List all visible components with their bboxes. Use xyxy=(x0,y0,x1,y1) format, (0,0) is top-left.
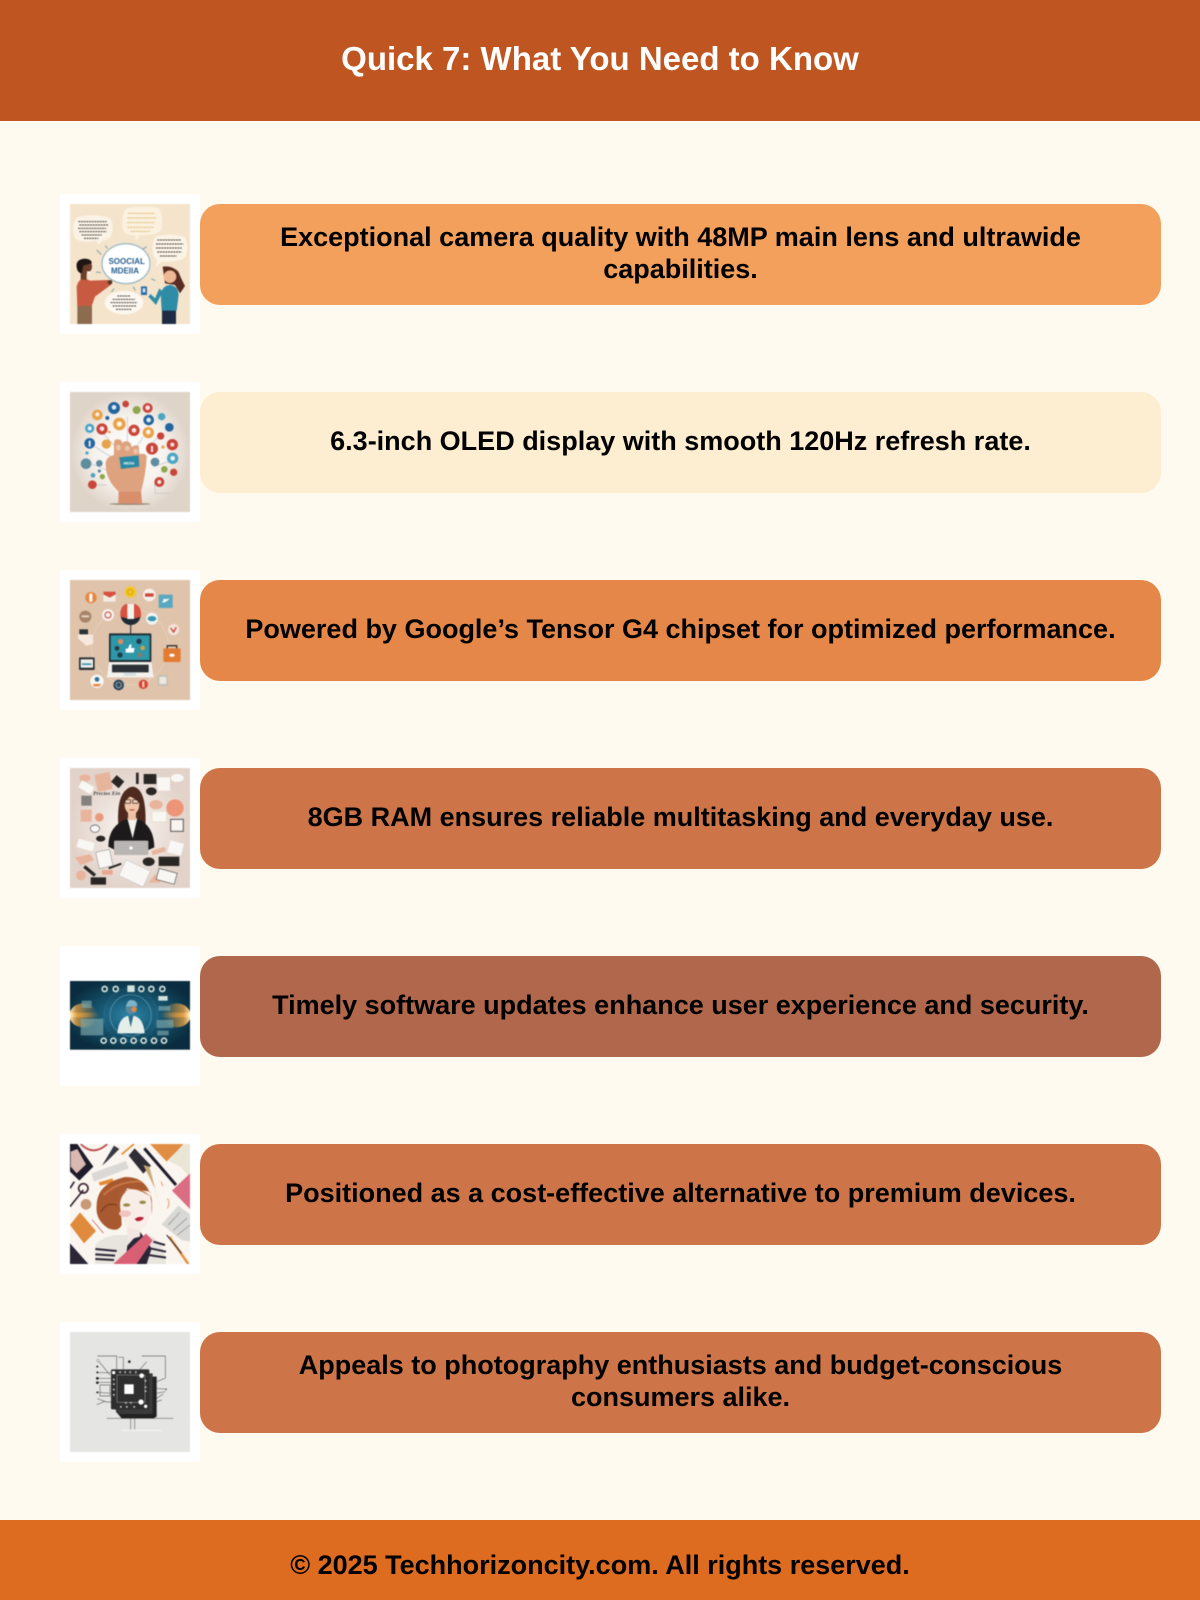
image: businesswoman with stationery: Precios Eín xyxy=(93,791,120,797)
text bar xyxy=(200,1144,1161,1245)
item 6: cost-effective alternative xyxy=(60,1134,1161,1274)
title header: Quick 7: What You Need to Know xyxy=(341,40,859,77)
item 1: camera quality xyxy=(60,194,1161,334)
item 2: OLED display xyxy=(60,382,1161,522)
image: illustrated woman among stationery xyxy=(60,1134,200,1274)
text bar: Timely software updates enhance user experience and security. xyxy=(272,990,1089,1020)
item 4: 8GB RAM xyxy=(60,758,1161,898)
image: two people discussing social media xyxy=(60,194,200,334)
text bar xyxy=(200,1332,1161,1433)
text bar xyxy=(200,580,1161,681)
text bar xyxy=(200,204,1161,305)
footer: © 2025 Techhorizoncity.com. All rights reserved. xyxy=(290,1550,910,1580)
image: hand surrounded by social icons: MEDIA xyxy=(124,462,135,466)
image: laptop surrounded by app icons xyxy=(60,570,200,710)
image: microchip line drawing xyxy=(60,1322,200,1462)
text bar: 8GB RAM ensures reliable multitasking and everyday use. xyxy=(308,802,1053,832)
title header xyxy=(0,0,1200,121)
text bar: Powered by Google’s Tensor G4 chipset for optimized performance. xyxy=(245,614,1116,644)
image: hand surrounded by social icons xyxy=(60,382,200,522)
item 7: target audience xyxy=(60,1322,1161,1462)
footer xyxy=(0,1520,1200,1600)
image: two people discussing social media: SOOCIAL xyxy=(108,257,145,266)
image: two people discussing social media: MDEIIA xyxy=(111,266,139,275)
image: businesswoman with stationery xyxy=(60,758,200,898)
text bar xyxy=(200,768,1161,869)
text bar: Appeals to photography enthusiasts and budget-conscious consumers alike. xyxy=(299,1350,1062,1412)
text bar xyxy=(200,956,1161,1057)
text bar xyxy=(200,392,1161,493)
text bar: Positioned as a cost-effective alternative to premium devices. xyxy=(285,1178,1076,1208)
text bar: 6.3-inch OLED display with smooth 120Hz refresh rate. xyxy=(330,426,1031,456)
item 3: Tensor G4 chipset xyxy=(60,570,1161,710)
item 5: software updates xyxy=(60,946,1161,1086)
text bar: Exceptional camera quality with 48MP main lens and ultrawide capabilities. xyxy=(280,222,1081,284)
image: futuristic medical interface banner xyxy=(60,946,200,1086)
